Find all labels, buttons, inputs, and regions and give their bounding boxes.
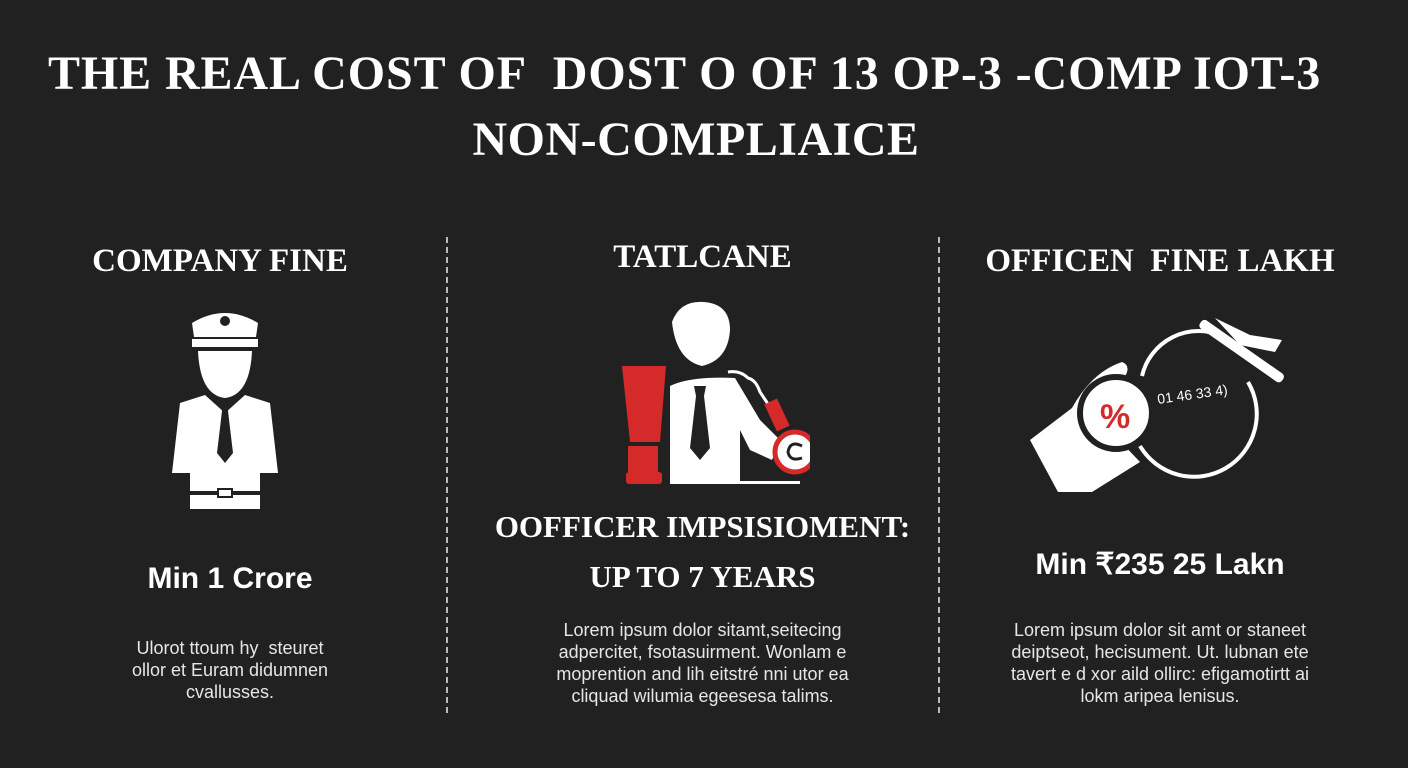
body text: cvallusses. bbox=[186, 682, 274, 702]
body text: lokm aripea lenisus. bbox=[1080, 686, 1240, 706]
body text: Ulorot ttoum hy steuret bbox=[136, 638, 324, 658]
body text: tavert e d xor aild ollirc: efigamotirtt ai bbox=[1011, 664, 1309, 684]
heading: tatlcane: TATLCANE bbox=[613, 239, 792, 275]
value: imprisonment: UP TO 7 YEARS bbox=[590, 559, 815, 594]
body text: Lorem ipsum dolor sit amt or staneet bbox=[1014, 620, 1306, 640]
panel: officer imprisonment bbox=[495, 239, 910, 706]
icon: hand with coin: % bbox=[1100, 398, 1130, 436]
value: min 235 25 lakn: Min ₹235 25 Lakn bbox=[1035, 548, 1285, 581]
icon: hand with coin bbox=[1030, 318, 1284, 492]
body text: ollor et Euram didumnen bbox=[132, 660, 328, 680]
panel: company fine bbox=[92, 243, 348, 702]
body text: Lorem ipsum dolor sitamt,seitecing bbox=[563, 620, 842, 640]
icon: officer bbox=[172, 313, 278, 509]
panel: officer fine bbox=[985, 243, 1335, 706]
value: imprisonment bbox=[495, 509, 910, 594]
body text: deiptseot, hecisument. Ut. lubnan ete bbox=[1011, 642, 1309, 662]
body text: cliquad wilumia egeesesa talims. bbox=[571, 686, 834, 706]
heading: officer fine lakh: OFFICEN FINE LAKH bbox=[985, 243, 1335, 279]
icon: officer with exclamation bbox=[622, 302, 810, 484]
body text bbox=[132, 638, 328, 702]
value: imprisonment: OOFFICER IMPSISIOMENT: bbox=[495, 509, 910, 544]
body text bbox=[556, 620, 849, 706]
icon: hand with coin: 01 46 33 4) bbox=[1156, 381, 1229, 407]
value: min 1 crore: Min 1 Crore bbox=[147, 562, 313, 595]
heading: company fine: COMPANY FINE bbox=[92, 243, 348, 279]
title: NON-COMPLIAICE bbox=[472, 113, 920, 166]
title: THE REAL COST OF DOST O OF 13 OP-3 -COMP IOT-3 bbox=[48, 47, 1321, 100]
body text bbox=[1011, 620, 1309, 706]
body text: moprention and lih eitstré nni utor ea bbox=[556, 664, 849, 684]
body text: adpercitet, fsotasuirment. Wonlam e bbox=[559, 642, 846, 662]
title bbox=[48, 47, 1321, 166]
